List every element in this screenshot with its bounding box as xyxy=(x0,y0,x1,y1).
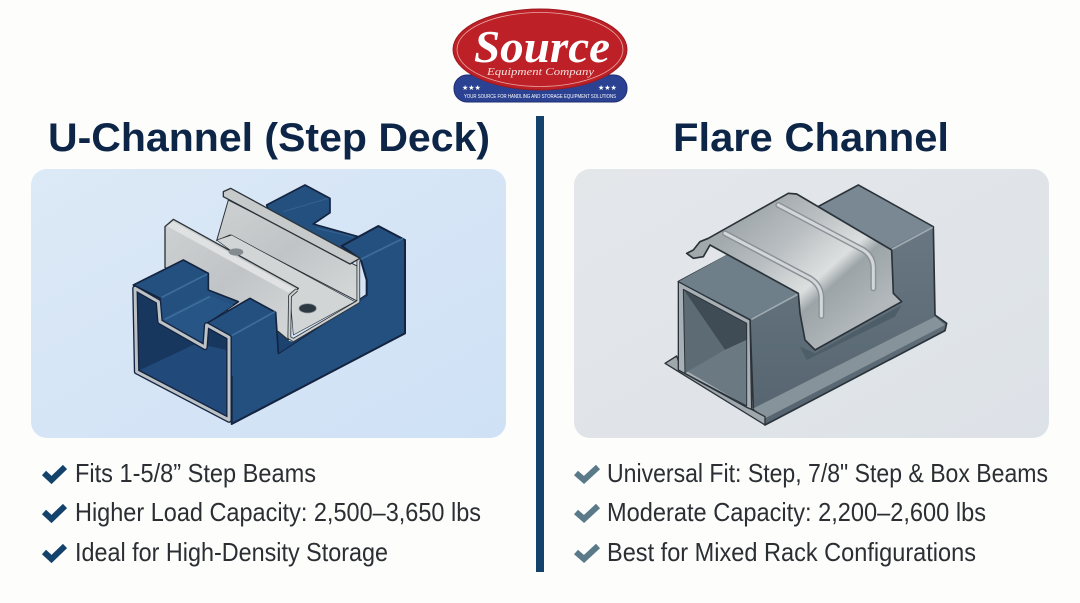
logo: YOUR SOURCE FOR HANDLING AND STORAGE EQUIPMENT SOLUTIONS xyxy=(464,94,617,100)
bullet 3: Best for Mixed Rack Configurations xyxy=(607,537,976,567)
logo xyxy=(453,9,627,102)
end profile xyxy=(289,261,358,340)
hollow front xyxy=(135,288,229,420)
logo: ★★★ xyxy=(598,84,617,92)
logo: Equipment Company xyxy=(486,66,594,78)
bullet 1: Fits 1-5/8” Step Beams xyxy=(75,458,316,488)
center divider xyxy=(536,116,544,572)
left wall xyxy=(165,219,298,340)
bullet 2: Moderate Capacity: 2,200–2,600 lbs xyxy=(607,497,986,527)
panel: Flare Channel illustration xyxy=(574,169,1049,438)
bullet 3: Ideal for High-Density Storage xyxy=(75,537,388,567)
icon: flare channel on box beam xyxy=(665,185,947,425)
saddle xyxy=(687,193,902,350)
logo: Source xyxy=(474,22,610,72)
notch backing xyxy=(277,295,367,353)
hollow interior xyxy=(683,289,725,373)
hole xyxy=(299,304,316,313)
top flange xyxy=(223,188,360,264)
ribs xyxy=(725,233,821,316)
front step blocks xyxy=(133,260,238,347)
left feature list xyxy=(44,458,481,567)
heading: Flare Channel: Flare Channel xyxy=(673,116,949,160)
heading: U-Channel: U-Channel (Step Deck) xyxy=(48,116,490,160)
logo: ★★★ xyxy=(462,84,481,92)
icon: U-channel on step beam xyxy=(133,185,405,424)
panel: U-Channel illustration xyxy=(31,169,506,438)
right feature list xyxy=(576,458,1048,567)
bullet 2: Higher Load Capacity: 2,500–3,650 lbs xyxy=(75,497,481,527)
back wall and floor of U-channel xyxy=(217,200,358,302)
